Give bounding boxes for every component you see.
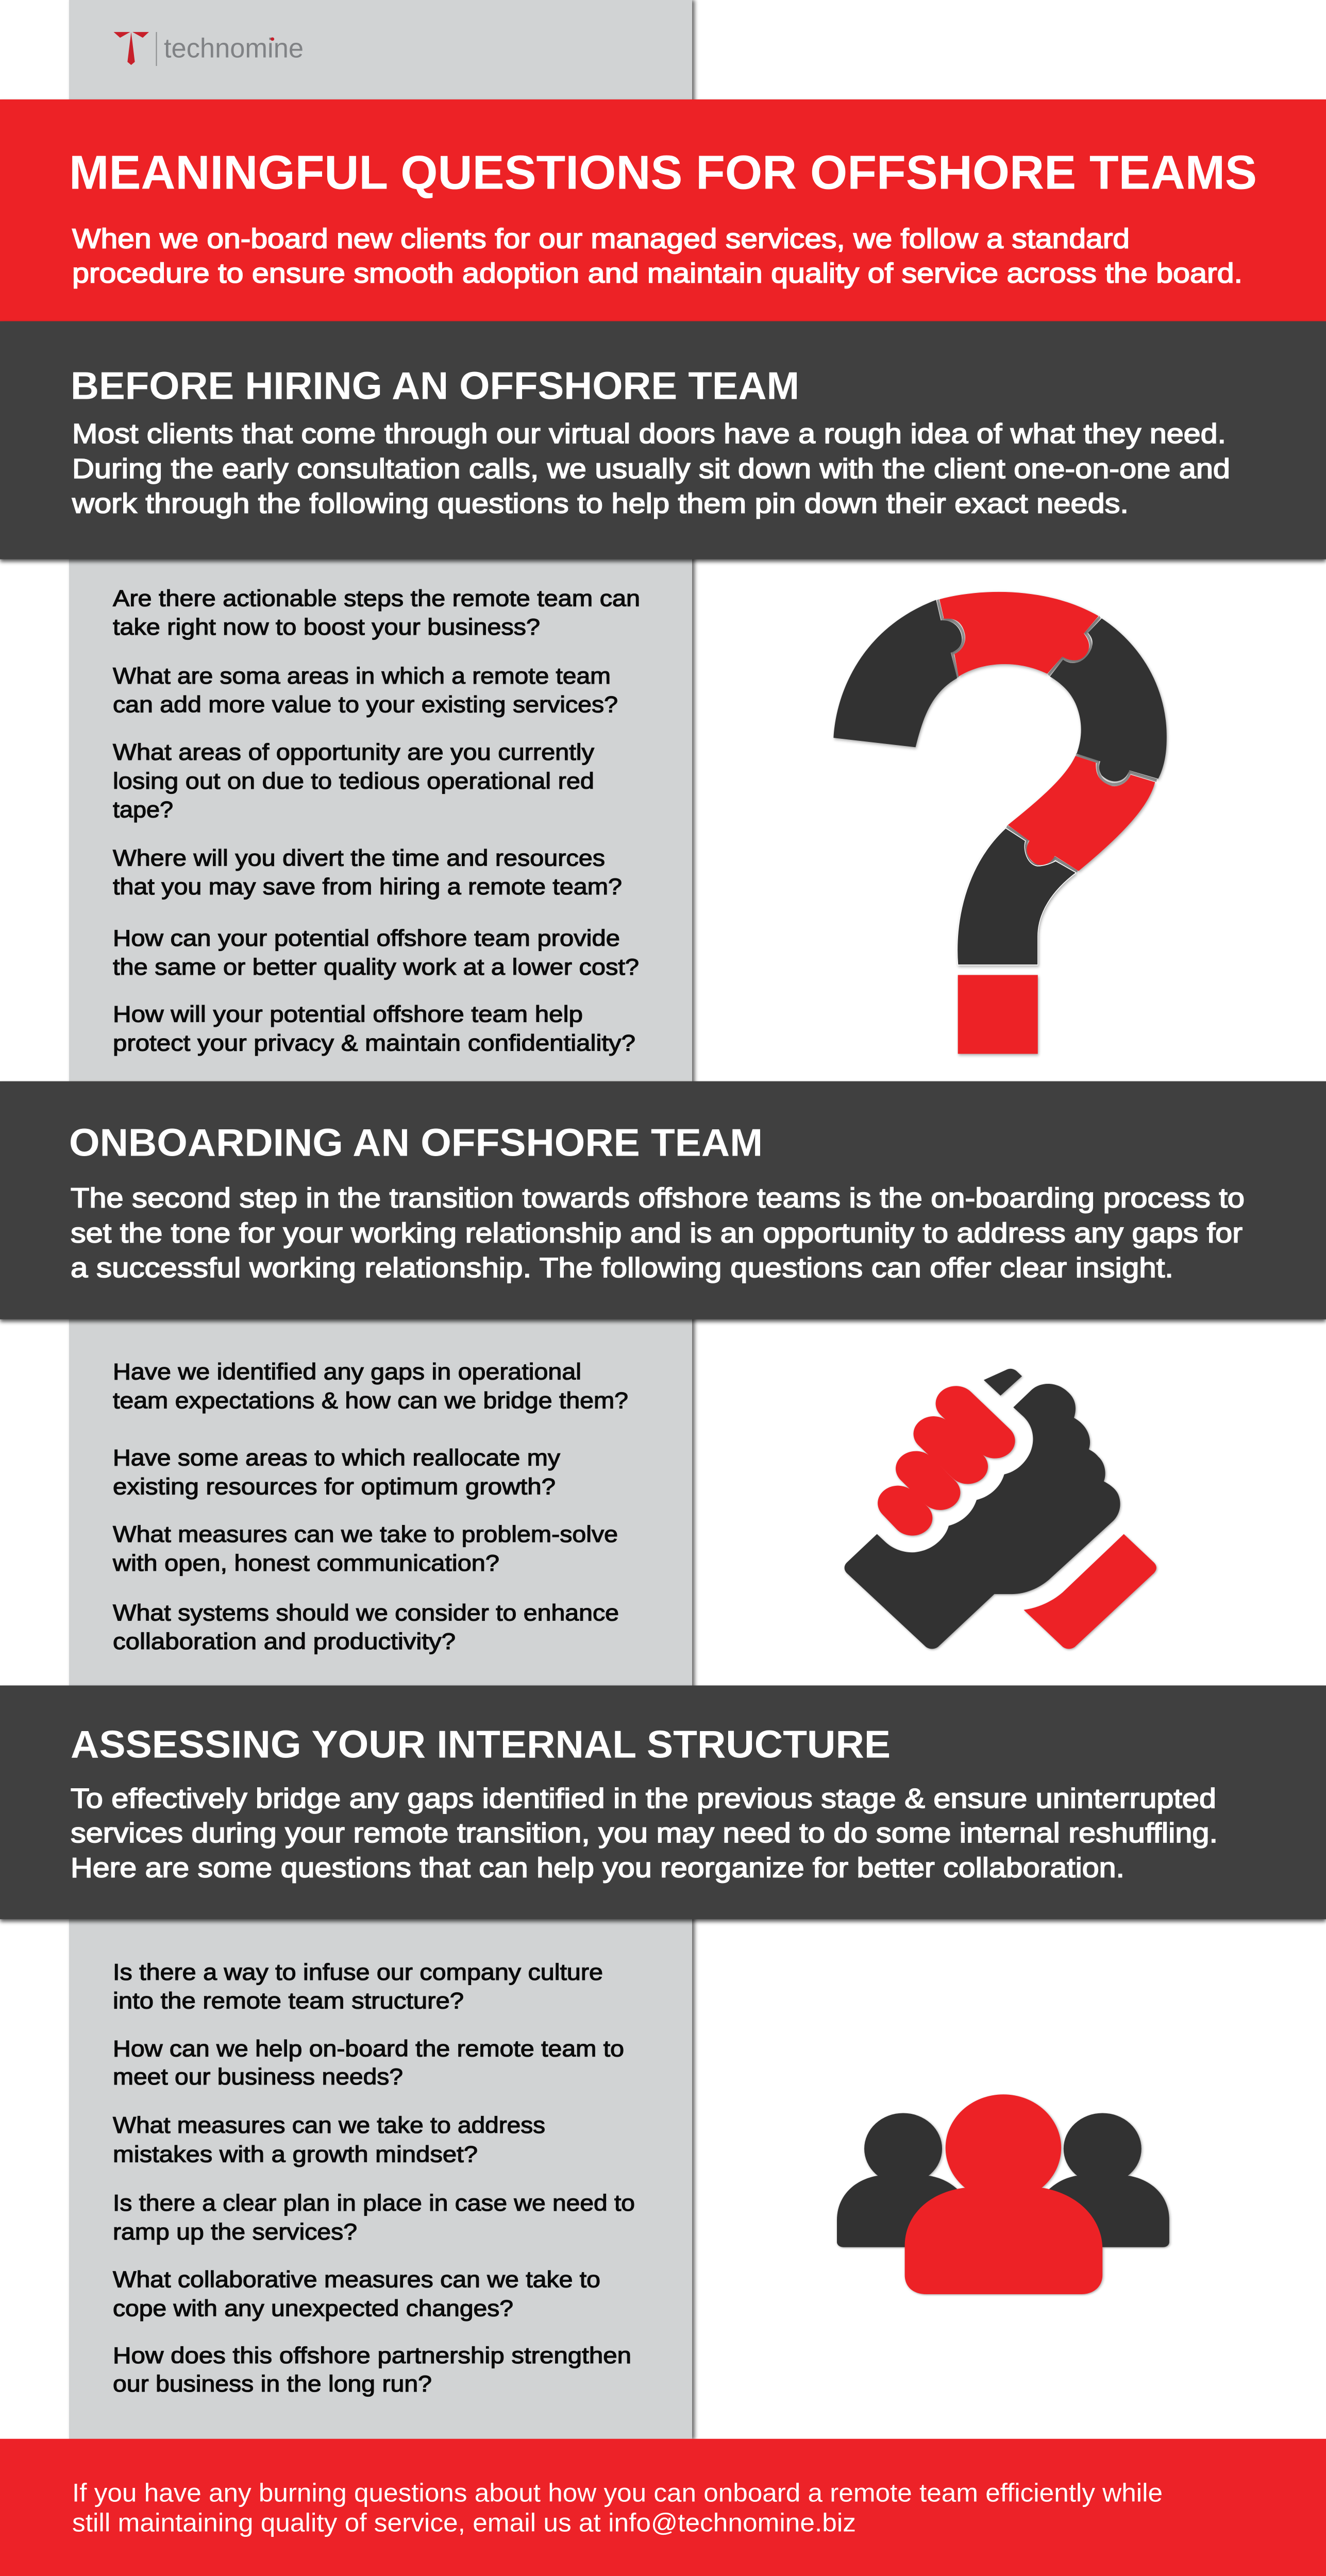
text: internal structure questions: What collaborative measures can we take to [113, 2266, 600, 2292]
text: before hiring questions: Where will you divert the time and resources [113, 845, 605, 871]
text: onboarding questions: team expectations & how can we bridge them? [113, 1387, 628, 1413]
text: before hiring intro: Most clients that come through our virtual doors have a rough idea of what they need. [72, 418, 1226, 449]
intro text: procedure to ensure smooth adoption and maintain quality of service across the board. [72, 257, 1243, 289]
text: before hiring questions: How will your potential offshore team help [113, 1001, 583, 1027]
text: onboarding intro: a successful working relationship. The following questions can offer clear insight. [71, 1252, 1173, 1283]
text: footer call to action [72, 2479, 1163, 2537]
panel: before hiring header [0, 321, 1326, 560]
text: before hiring intro [72, 418, 1230, 519]
text: before hiring intro: During the early consultation calls, we usually sit down with the client one-on-one and [72, 453, 1230, 484]
text: internal structure questions: What measures can we take to address [113, 2112, 545, 2138]
text: before hiring questions: Are there actionable steps the remote team can [113, 585, 640, 611]
text: onboarding questions: Have some areas to which reallocate my [113, 1445, 561, 1470]
text: before hiring questions: the same or better quality work at a lower cost? [113, 954, 639, 979]
icon: puzzle question mark [833, 592, 1167, 1054]
text: onboarding questions: collaboration and productivity? [113, 1629, 456, 1654]
logo: technomine [113, 32, 304, 66]
text: onboarding intro: set the tone for your working relationship and is an opportunity to address any gaps for [71, 1217, 1243, 1248]
text: before hiring questions: take right now to boost your business? [113, 614, 540, 640]
icon: handshake grip [845, 1369, 1156, 1649]
heading: before hiring: BEFORE HIRING AN OFFSHORE TEAM [71, 364, 799, 408]
heading: internal structure: ASSESSING YOUR INTERNAL STRUCTURE [71, 1722, 891, 1766]
text: onboarding questions [112, 1359, 628, 1654]
text: before hiring questions: that you may save from hiring a remote team? [113, 874, 622, 900]
text: internal structure questions: How does this offshore partnership strengthen [113, 2343, 631, 2368]
text: internal structure questions: Is there a way to infuse our company culture [113, 1959, 603, 1985]
text: onboarding questions: Have we identified any gaps in operational [113, 1359, 581, 1384]
panel: grey question column [69, 0, 692, 2440]
text: onboarding questions: What systems should we consider to enhance [113, 1600, 619, 1625]
panel: internal structure header [0, 1685, 1326, 1919]
heading: onboarding: ONBOARDING AN OFFSHORE TEAM [69, 1121, 763, 1164]
panel: red title banner [0, 99, 1326, 321]
text: internal structure intro: To effectively bridge any gaps identified in the previous stage & ensure uninterrupted [71, 1783, 1216, 1814]
text: before hiring intro: work through the following questions to help them pin down their exact needs. [72, 487, 1129, 519]
text: footer call to action: still maintaining quality of service, email us at info@technomine.biz [72, 2509, 856, 2537]
title: MEANINGFUL QUESTIONS FOR OFFSHORE TEAMS [69, 146, 1257, 199]
text: internal structure questions: ramp up the services? [113, 2218, 357, 2244]
text: internal structure questions: meet our business needs? [113, 2064, 403, 2090]
text: onboarding questions: existing resources for optimum growth? [113, 1473, 556, 1499]
text: onboarding questions: What measures can we take to problem-solve [113, 1521, 618, 1547]
text: internal structure questions: How can we help on-board the remote team to [113, 2036, 624, 2061]
icon: three people [837, 2094, 1169, 2294]
logo: technomine: technomine [164, 32, 304, 63]
text: onboarding questions: with open, honest communication? [112, 1550, 499, 1575]
text: before hiring questions [113, 585, 640, 1056]
text: onboarding intro: The second step in the transition towards offshore teams is the on-boarding process to [71, 1182, 1245, 1213]
text: internal structure questions: cope with any unexpected changes? [113, 2295, 513, 2321]
text: internal structure questions: our business in the long run? [113, 2370, 432, 2396]
text: internal structure intro: services during your remote transition, you may need to do some internal reshuffling. [71, 1817, 1218, 1848]
panel: onboarding header [0, 1081, 1326, 1319]
intro text [72, 223, 1243, 289]
text: before hiring questions: How can your potential offshore team provide [113, 925, 620, 951]
text: internal structure intro: Here are some questions that can help you reorganize for better collaboration. [71, 1852, 1124, 1883]
text: internal structure questions: mistakes with a growth mindset? [113, 2141, 478, 2167]
text: before hiring questions: protect your privacy & maintain confidentiality? [113, 1030, 635, 1056]
panel: red footer [0, 2439, 1326, 2576]
text: internal structure questions: into the remote team structure? [113, 1988, 464, 2013]
intro text: When we on-board new clients for our managed services, we follow a standard [72, 223, 1130, 254]
text: before hiring questions: losing out on due to tedious operational red [113, 768, 594, 794]
text: internal structure intro [71, 1783, 1218, 1883]
text: before hiring questions: tape? [113, 796, 173, 822]
text: before hiring questions: What are soma areas in which a remote team [113, 663, 611, 688]
text: internal structure questions: Is there a clear plan in place in case we need to [113, 2190, 635, 2216]
text: internal structure questions [113, 1959, 635, 2396]
text: onboarding intro [71, 1182, 1245, 1283]
text: before hiring questions: can add more value to your existing services? [113, 691, 618, 717]
text: before hiring questions: What areas of opportunity are you currently [113, 739, 595, 765]
text: footer call to action: If you have any burning questions about how you can onboard a remote team efficiently while [72, 2479, 1163, 2507]
